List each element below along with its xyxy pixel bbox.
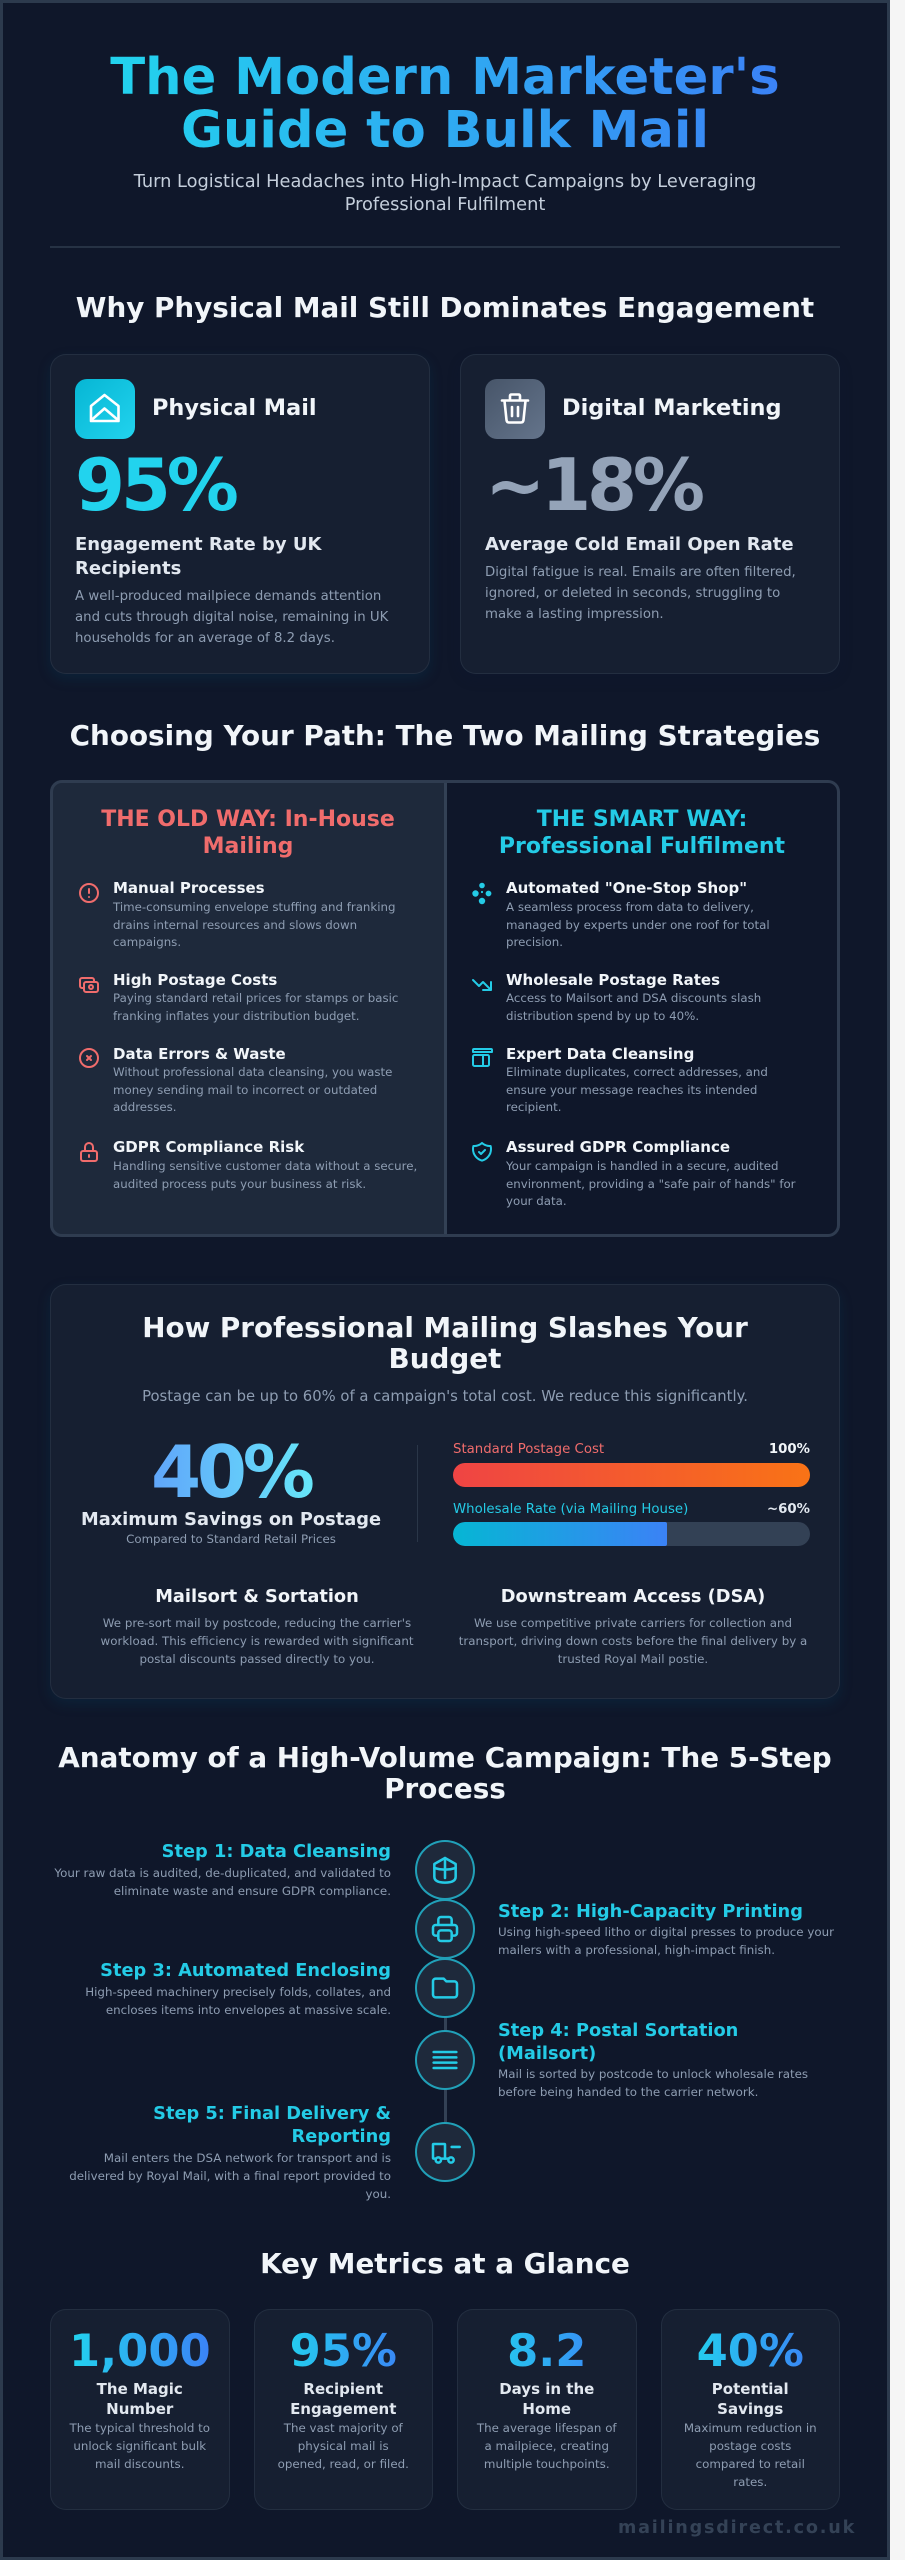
icon: archive [472,1048,493,1067]
metric text [254,2419,433,2473]
metric text [50,2419,230,2473]
metric card: 95% [254,2309,433,2510]
description: make a lasting impression. [485,607,664,622]
subtitle: Professional Fulfilment [345,194,545,215]
item heading: Data Errors & Waste [113,1045,286,1063]
item text [113,991,398,1023]
stat: 40% savings [81,1430,381,1546]
item text [506,1065,768,1114]
stat label: Average Cold Email Open Rate [485,534,794,555]
heading: anatomy: Anatomy of a High-Volume Campaign: The 5-Step [58,1741,832,1774]
item text: Handling sensitive customer data without a secure, [113,1159,417,1173]
item text: ensure your message reaches its intended [506,1083,757,1097]
step text: Using high-speed litho or digital presses to produce your [498,1925,834,1939]
step heading: (Mailsort) [498,2043,596,2064]
description: ignored, or deleted in seconds, struggling to [485,586,780,601]
metric title [457,2378,636,2420]
step heading: Reporting [292,2126,391,2147]
big number: 40% [151,1430,311,1514]
metric text: The vast majority of [284,2421,403,2435]
item heading: Expert Data Cleansing [506,1045,694,1063]
metric text: a mailpiece, creating [485,2439,609,2453]
panel heading: How Professional Mailing Slashes Your [142,1311,748,1344]
description [101,1616,414,1666]
item: data cleansing [472,1045,768,1114]
description: households for an average of 8.2 days. [75,631,335,646]
item text: Time-consuming envelope stuffing and franking [113,900,395,914]
metric number: 95% [290,2324,397,2376]
sub heading: Downstream Access (DSA) [501,1586,765,1607]
metric title: Engagement [290,2400,396,2418]
metric text: The typical threshold to [69,2421,210,2435]
bar label: standard: Standard Postage Cost [453,1442,604,1457]
column heading: THE OLD WAY: In-House [101,807,395,832]
item heading: GDPR Compliance Risk [113,1138,304,1156]
item text [506,1159,796,1208]
item text: addresses. [113,1100,177,1114]
icon: step 3 folder [415,1958,475,2018]
step text: before being handed to the carrier network. [498,2085,758,2099]
item text [113,1065,392,1114]
bar: standard [453,1463,810,1487]
heading: anatomy: Process [384,1772,506,1804]
metric number: 40% [697,2324,804,2376]
step text: delivered by Royal Mail, with a final report provided to [69,2169,391,2183]
icon: step 1 cube [415,1840,475,1900]
item: manual processes [79,879,395,949]
icon: step 5 truck [415,2122,475,2182]
heading: anatomy [58,1741,832,1804]
step 4 text [498,2019,843,2101]
description [485,565,796,622]
icon: trending down [472,979,492,991]
stat: 18%: ~18% [485,443,701,527]
item text: Access to Mailsort and DSA discounts slash [506,991,761,1005]
timeline: five step process [0,1830,890,2220]
description: workload. This efficiency is rewarded with significant [101,1634,413,1648]
item text: managed by experts under one roof for total [506,918,770,932]
panel subheading: Postage can be up to 60% of a campaign's total cost. We reduce this significantly. [142,1388,748,1405]
item text: environment, providing a "safe pair of hands" for [506,1177,796,1191]
step heading: Step 2: High-Capacity Printing [498,1901,803,1922]
step heading: Step 3: Automated Enclosing [100,1960,391,1981]
card heading: Digital Marketing [562,395,782,421]
item text: Without professional data cleansing, you waste [113,1065,392,1079]
step text [41,1864,391,1900]
column heading: Mailing [203,834,293,859]
step 3 text [41,1959,391,2031]
panel heading: Budget [389,1342,501,1374]
icon: alert [79,883,99,903]
bar value: 100%: 100% [769,1442,810,1457]
metric title: The Magic [97,2380,183,2398]
column heading: Professional Fulfilment [499,834,785,859]
panel: two mailing strategies comparison [50,780,840,1237]
step 2 text [498,1900,843,1971]
icon: step 4 lines [415,2030,475,2090]
heading: key metrics: Key Metrics at a Glance [260,2247,630,2280]
metric text: mail discounts. [95,2457,184,2471]
step heading: Step 4: Postal Sortation [498,2020,738,2041]
description: A well-produced mailpiece demands attention [75,589,381,604]
column heading: THE SMART WAY: [537,807,747,832]
step text: High-speed machinery precisely folds, collates, and [85,1985,391,1999]
stat label: Engagement Rate by UK [75,534,321,555]
item: high postage costs [79,971,398,1023]
stat: 95%: 95% [75,443,235,527]
item text: your data. [506,1194,567,1208]
metric text: Maximum reduction in [684,2421,817,2435]
icon: cash [79,977,99,993]
item heading: Manual Processes [113,879,265,897]
bar value: 60%: ~60% [767,1502,810,1517]
step text: Your raw data is audited, de-duplicated, and validated to [54,1866,391,1880]
metric number [482,2326,612,2376]
metric title: Potential [712,2380,789,2398]
step 5 text [41,2102,391,2203]
item text: audited process puts your business at risk. [113,1177,366,1191]
metric card: 1,000 [50,2309,230,2510]
metric text: opened, read, or filed. [278,2457,409,2471]
description: We use competitive private carriers for collection and [474,1616,792,1630]
metric card: 8.2 [457,2309,636,2510]
description: trusted Royal Mail postie. [558,1652,708,1666]
item text [506,900,770,949]
text block: mailsort [101,1586,414,1666]
stat label [75,534,322,579]
title: Guide to Bulk Mail [181,100,709,160]
step text [41,1983,391,2019]
step text: mailers with a professional, high-impact finish. [498,1943,775,1957]
metric text: multiple touchpoints. [484,2457,610,2471]
item text: distribution spend by up to 40%. [506,1009,699,1023]
metric text: The average lifespan of [477,2421,617,2435]
step heading: Step 1: Data Cleansing [162,1841,391,1862]
description: Digital fatigue is real. Emails are often filtered, [485,565,796,580]
panel: digital marketing card [460,354,840,674]
step text: Mail is sorted by postcode to unlock wholesale rates [498,2067,808,2081]
icon: dots [472,882,492,904]
item: gdpr risk [80,1138,417,1191]
item heading: High Postage Costs [113,971,277,989]
card heading: Physical Mail [152,395,317,421]
footer: website: mailingsdirect.co.uk [618,2518,856,2538]
stat note: Compared to Standard Retail Prices [126,1532,336,1546]
step heading [498,2019,843,2065]
item: data errors [79,1045,392,1114]
description [75,589,388,646]
step text [498,2065,843,2101]
heading: why physical mail: Why Physical Mail Still Dominates Engagement [76,291,814,324]
step text: you. [365,2187,391,2201]
icon: step 2 printer [415,1899,475,1959]
item text: A seamless process from data to delivery, [506,900,754,914]
metric text [457,2419,636,2473]
item: one-stop shop [472,879,770,949]
subtitle: Turn Logistical Headaches into High-Impact Campaigns by Leveraging [134,171,756,192]
panel heading [142,1311,748,1374]
item heading: Automated "One-Stop Shop" [506,879,747,897]
column: the old way [79,807,417,1191]
item text: Paying standard retail prices for stamps or basic [113,991,398,1005]
item text: recipient. [506,1100,562,1114]
icon: lock [80,1142,98,1162]
icon: mail house [75,379,135,439]
title: The Modern Marketer's [110,47,780,107]
item text [113,1159,417,1191]
stat label: Recipients [75,558,181,579]
title [110,51,780,157]
step text: encloses items into envelopes at massive scale. [106,2003,391,2017]
item: assured gdpr [472,1138,796,1208]
bar: wholesale [453,1522,810,1546]
metric text: postage costs [709,2439,791,2453]
item heading: Wholesale Postage Rates [506,971,720,989]
column heading [499,807,785,859]
item text [506,991,761,1023]
metric title: Savings [717,2400,783,2418]
item text: drains internal resources and slows down [113,918,357,932]
icon: x circle [79,1048,99,1068]
description: transport, driving down costs before the final delivery by a [459,1634,807,1648]
metric text: unlock significant bulk [73,2439,206,2453]
text block: dsa [459,1586,807,1666]
item text [113,900,395,949]
sub heading: Mailsort & Sortation [155,1586,359,1607]
column: the smart way [472,807,796,1208]
metric title [254,2378,433,2420]
column heading [101,807,395,859]
step heading [41,2102,391,2148]
metric text: physical mail is [298,2439,389,2453]
metric title: Home [522,2400,571,2418]
panel: physical mail card [50,354,430,674]
item: wholesale rates [472,971,761,1023]
item text: campaigns. [113,935,181,949]
panel: budget savings [50,1284,840,1699]
metric title: Number [106,2400,173,2418]
metric text: rates. [733,2475,767,2489]
metric title: Recipient [303,2380,383,2398]
item text: Eliminate duplicates, correct addresses, and [506,1065,768,1079]
step text [498,1923,843,1959]
metric text: compared to retail [696,2457,805,2471]
bar label: wholesale: Wholesale Rate (via Mailing House) [453,1502,688,1517]
metric number: 1,000 [69,2324,211,2376]
stat label: Maximum Savings on Postage [81,1509,381,1530]
description: postal discounts passed directly to you. [139,1652,374,1666]
metric title: Days in the [499,2380,594,2398]
subtitle [134,171,756,215]
metric number: 8.2 [507,2324,586,2376]
bar chart: postage cost [453,1442,810,1546]
description: and cuts through digital noise, remaining in UK [75,610,388,625]
heading: mailing strategies: Choosing Your Path: The Two Mailing Strategies [70,719,820,752]
metric title [660,2378,840,2420]
step heading: Step 5: Final Delivery & [153,2103,391,2124]
item text: precision. [506,935,563,949]
item text: money sending mail to incorrect or outdated [113,1083,377,1097]
step 1 text [41,1840,391,1912]
item heading: Assured GDPR Compliance [506,1138,730,1156]
description [459,1616,807,1666]
step text: Mail enters the DSA network for transport and is [104,2151,391,2165]
metric title [50,2378,230,2420]
metric card: 40% [660,2309,840,2510]
icon: shield check [472,1142,492,1162]
icon: trash [485,379,545,439]
item text: Your campaign is handled in a secure, audited [506,1159,779,1173]
description: We pre-sort mail by postcode, reducing the carrier's [103,1616,411,1630]
step text: eliminate waste and ensure GDPR compliance. [114,1884,391,1898]
step text [41,2149,391,2203]
item text: franking inflates your distribution budget. [113,1009,360,1023]
metric text [660,2419,840,2491]
